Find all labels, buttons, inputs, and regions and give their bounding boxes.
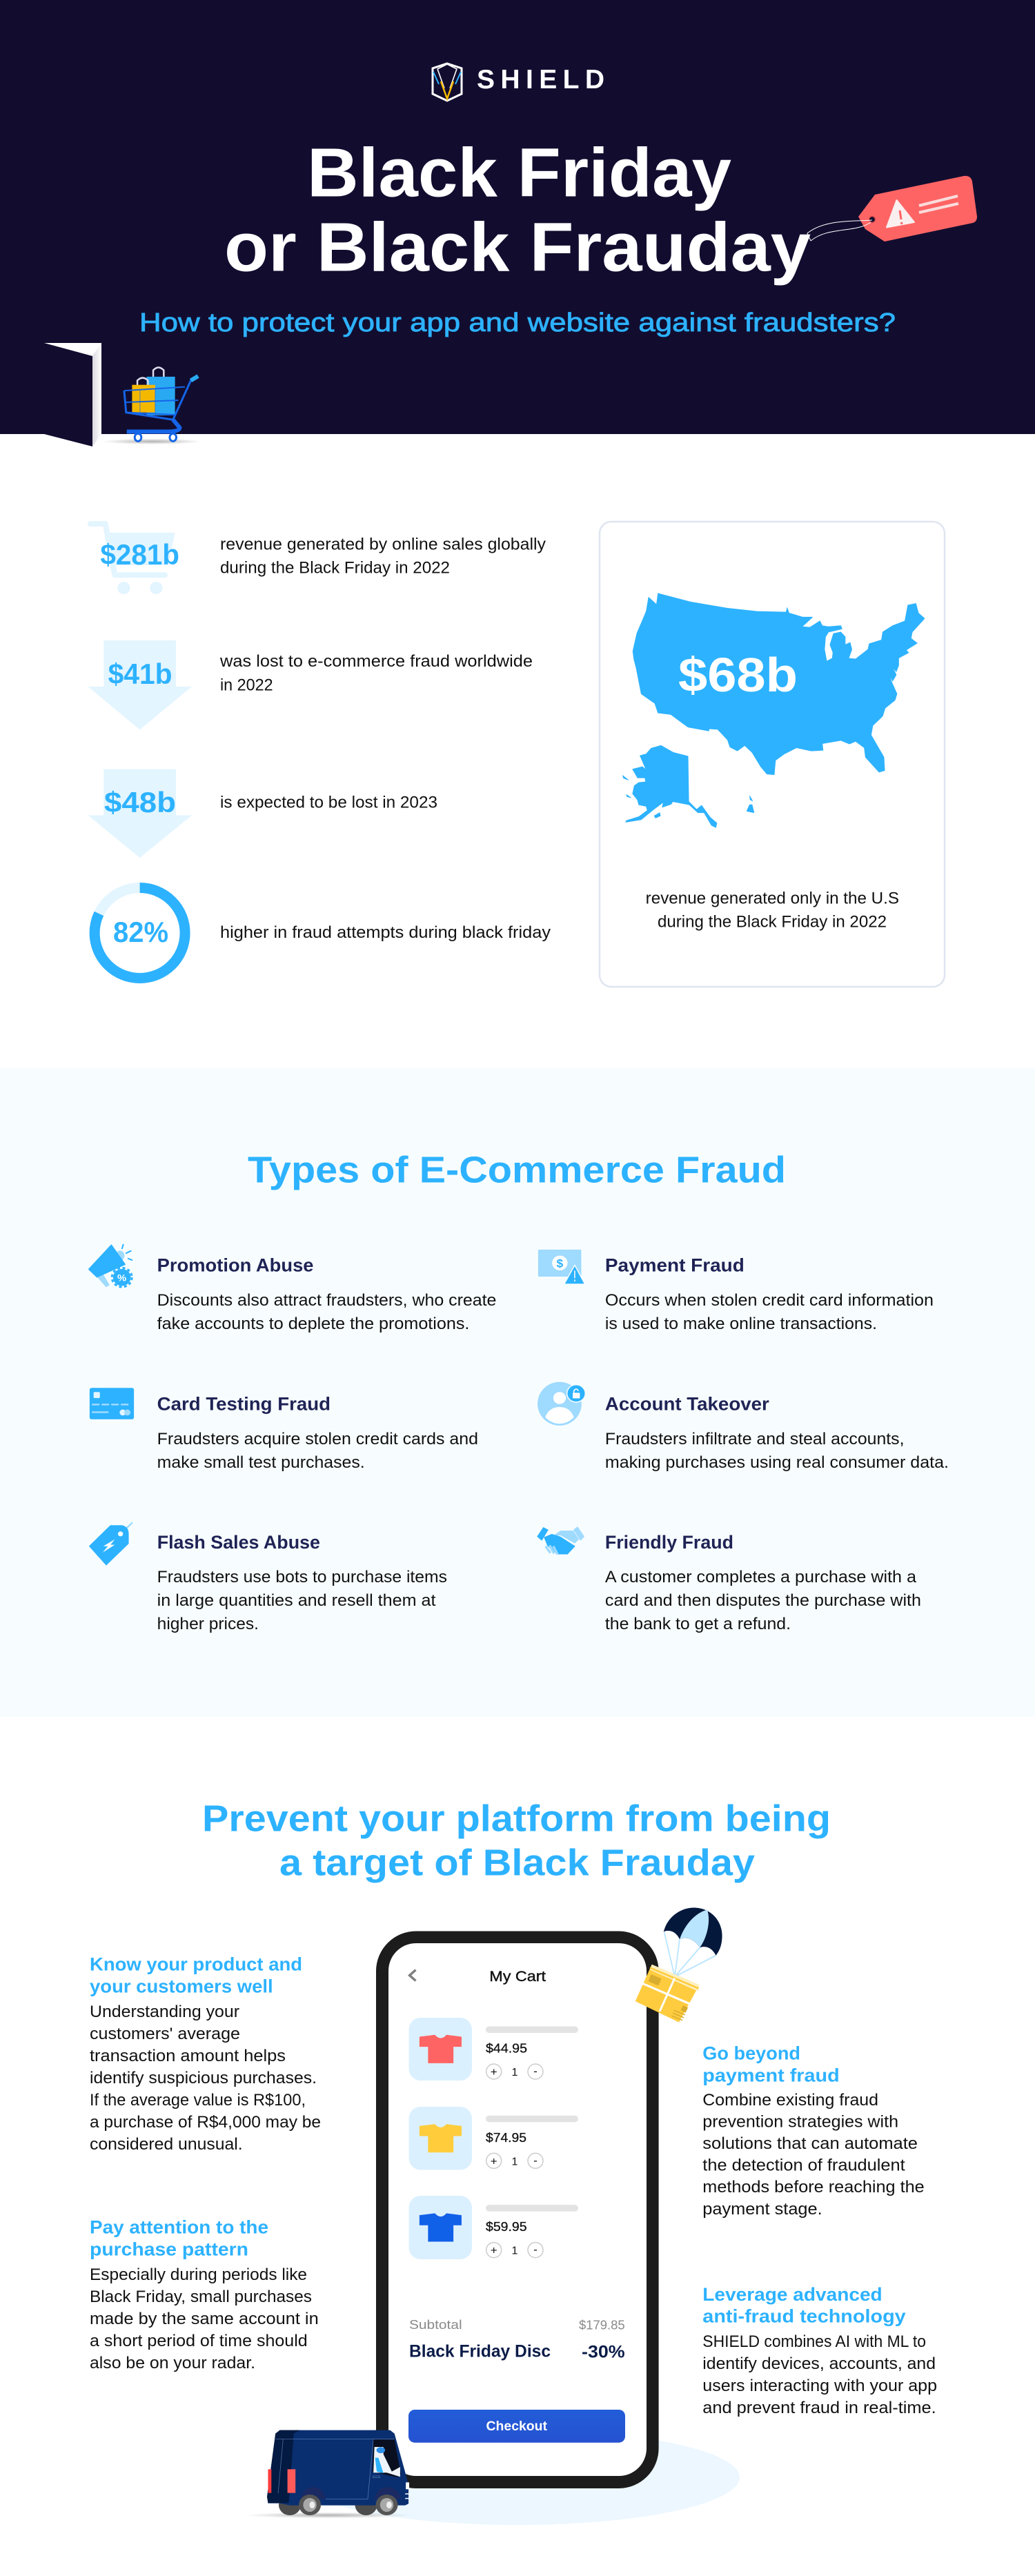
title: Black Friday [307, 134, 731, 211]
icon: megaphone: % [117, 1273, 126, 1284]
name: Card Testing Fraud [157, 1393, 331, 1414]
name: Flash Sales Abuse [157, 1532, 320, 1553]
subtotal row: Subtotal [409, 2318, 462, 2332]
description [219, 652, 533, 694]
description: in 2022 [220, 676, 273, 694]
icon: megaphone [89, 1244, 132, 1287]
tip: purchase pattern: purchase pattern [90, 2239, 248, 2259]
description: higher prices. [157, 1615, 259, 1633]
logo: SHIELD [433, 63, 604, 101]
stat: 281b [90, 524, 546, 594]
stat: 41b [88, 640, 533, 729]
cart item 3 [408, 2196, 578, 2259]
description: was lost to e-commerce fraud worldwide [219, 652, 533, 671]
illustration: phone with cart [376, 1931, 659, 2488]
tip: know your product: a purchase of R$4,000 may be [90, 2113, 321, 2132]
tip: know your product: considered unusual. [90, 2135, 243, 2154]
name: Account Takeover [605, 1393, 769, 1414]
tip: know your product [90, 1954, 321, 2154]
cart item 2: 1 [512, 2156, 518, 2167]
tip: go beyond payment fraud: methods before reaching the [702, 2178, 925, 2196]
illustration: ground ellipse [295, 2430, 740, 2525]
subtitle: How to protect your app and website against fraudsters? [139, 308, 896, 337]
description: is expected to be lost in 2023 [220, 794, 437, 812]
logo: SHIELD: SHIELD [477, 65, 604, 95]
tip: know your product: your customers well [90, 1976, 273, 1997]
description: is used to make online transactions. [605, 1315, 877, 1333]
discount row: -30% [582, 2343, 625, 2362]
value: $48b [104, 786, 176, 818]
cart item 3: - [533, 2243, 538, 2257]
description: Fraudsters acquire stolen credit cards and [157, 1430, 478, 1448]
fraud: card testing [90, 1388, 478, 1472]
checkout button: Checkout [486, 2419, 547, 2434]
tip: advanced anti-fraud technology: users interacting with your app [702, 2377, 937, 2395]
tip: go beyond payment fraud: Go beyond [702, 2043, 800, 2064]
description: make small test purchases. [157, 1453, 365, 1472]
icon: shopping cart with bags [102, 367, 201, 444]
cart title: My Cart [489, 1969, 546, 1985]
cart item 1: - [533, 2065, 538, 2078]
description: revenue generated only in the U.S [646, 889, 899, 907]
panel: US revenue card [600, 522, 945, 987]
tip: advanced anti-fraud technology: SHIELD combines AI with ML to [702, 2332, 926, 2351]
cart item 3: $59.95 [486, 2219, 527, 2234]
panel: types of e-commerce fraud [0, 1068, 1035, 1717]
discount row: Black Friday Disc [409, 2342, 551, 2361]
fraud: account takeover [538, 1382, 949, 1472]
chart: progress ring [95, 887, 185, 979]
heading: Types of E-Commerce Fraud [248, 1149, 786, 1190]
icon: credit card [90, 1388, 134, 1419]
icon: handshake [537, 1526, 584, 1555]
heading: prevent your platform: a target of Black Frauday [279, 1842, 755, 1884]
cart item 1 [408, 2018, 578, 2081]
icon: warning price tag [807, 176, 977, 242]
tip: know your product: customers' average [90, 2025, 240, 2043]
description: fake accounts to deplete the promotions. [157, 1315, 469, 1333]
tip: go beyond payment fraud: Combine existing fraud [702, 2091, 878, 2110]
name: Promotion Abuse [157, 1255, 313, 1275]
tip: know your product: Know your product and [90, 1954, 302, 1975]
tip: advanced anti-fraud technology: identify devices, accounts, and [702, 2354, 936, 2373]
subtotal row [409, 2318, 625, 2332]
cart item 3: + [491, 2244, 497, 2257]
description: during the Black Friday in 2022 [658, 912, 887, 931]
tip: know your product: If the average value is R$100, [90, 2091, 306, 2110]
tip: purchase pattern: Pay attention to the [90, 2216, 268, 2237]
name: Friendly Fraud [605, 1532, 733, 1553]
description [157, 1430, 478, 1472]
cart item 1: 1 [512, 2067, 518, 2078]
fraud: friendly fraud [537, 1526, 921, 1633]
tip: purchase pattern [90, 2216, 319, 2372]
heading: prevent your platform: Prevent your platform from being [202, 1798, 831, 1839]
cart item 2: $74.95 [486, 2130, 526, 2145]
tip: purchase pattern: made by the same account in [90, 2310, 319, 2328]
tip: purchase pattern: also be on your radar. [90, 2354, 255, 2372]
value: 82% [113, 916, 168, 948]
icon: door [44, 343, 101, 446]
tip: advanced anti-fraud technology [702, 2284, 937, 2417]
description [605, 1291, 934, 1333]
icon: back chevron [410, 1970, 415, 1980]
value: $68b [678, 648, 798, 702]
tip: go beyond payment fraud: payment stage. [702, 2200, 822, 2219]
title: or Black Frauday [224, 209, 811, 286]
value: $41b [108, 658, 172, 690]
tip: purchase pattern: a short period of time should [90, 2332, 308, 2350]
stat: 48b [88, 769, 437, 858]
fraud: promotion abuse [89, 1244, 496, 1333]
tip: know your product: transaction amount helps [90, 2047, 286, 2065]
map: United States [622, 593, 925, 827]
tip: go beyond payment fraud: prevention strategies with [702, 2112, 898, 2131]
icon: pale cart [90, 524, 175, 594]
tip: know your product: Understanding your [90, 2003, 239, 2021]
icon: down arrow [88, 769, 192, 858]
illustration: delivery van [245, 2430, 412, 2518]
description [605, 1430, 949, 1472]
fraud: flash sales abuse [90, 1522, 447, 1633]
cart item 2: - [533, 2154, 538, 2167]
illustration: parachute with package [635, 1907, 722, 2023]
cart item 3: 1 [512, 2245, 518, 2257]
description [220, 535, 546, 577]
heading: prevent your platform [202, 1798, 831, 1884]
panel: header [0, 0, 1035, 446]
stat: 82 percent [95, 887, 551, 979]
icon: user with lock [538, 1382, 585, 1426]
discount row [409, 2342, 625, 2362]
description: Fraudsters use bots to purchase items [157, 1568, 447, 1586]
subtotal row: $179.85 [579, 2319, 625, 2332]
description [157, 1291, 496, 1333]
description: A customer completes a purchase with a [605, 1568, 917, 1586]
description: Discounts also attract fraudsters, who create [157, 1291, 496, 1310]
cart item 1: $44.95 [486, 2041, 527, 2055]
description: during the Black Friday in 2022 [220, 558, 450, 577]
panel: key statistics [88, 524, 551, 979]
description: the bank to get a refund. [605, 1615, 791, 1633]
tip: go beyond payment fraud [702, 2043, 925, 2219]
icon: down arrow [88, 640, 192, 729]
cart item 1: + [491, 2065, 497, 2078]
tip: advanced anti-fraud technology: Leverage advanced [702, 2284, 883, 2305]
tip: go beyond payment fraud: the detection of fraudulent [702, 2156, 905, 2175]
description: Occurs when stolen credit card information [605, 1291, 934, 1310]
icon: banknote with warning [538, 1250, 585, 1284]
tip: go beyond payment fraud: payment fraud [702, 2065, 840, 2085]
description [646, 889, 899, 931]
tip: purchase pattern: Especially during periods like [90, 2265, 307, 2284]
description [157, 1568, 447, 1633]
description: card and then disputes the purchase with [605, 1591, 921, 1610]
description [605, 1568, 921, 1633]
checkout button [408, 2410, 625, 2443]
description: making purchases using real consumer data. [605, 1453, 949, 1472]
tip: go beyond payment fraud: solutions that can automate [702, 2134, 918, 2153]
description: revenue generated by online sales globally [220, 535, 546, 553]
title [224, 134, 811, 286]
fraud: payment fraud [538, 1250, 934, 1333]
cart item 2: + [491, 2154, 497, 2167]
tip: purchase pattern: Black Friday, small purchases [90, 2288, 312, 2306]
icon: banknote with warning: $ [557, 1257, 564, 1270]
tip: advanced anti-fraud technology: and prevent fraud in real-time. [702, 2399, 936, 2417]
tip: know your product: identify suspicious purchases. [90, 2069, 317, 2087]
value: $281b [100, 538, 179, 571]
name: Payment Fraud [605, 1255, 745, 1275]
description: Fraudsters infiltrate and steal accounts, [605, 1430, 904, 1448]
icon: lightning tag [90, 1522, 132, 1565]
description: in large quantities and resell them at [157, 1591, 436, 1610]
tip: advanced anti-fraud technology: anti-fraud technology [702, 2306, 906, 2327]
cart item 2 [408, 2107, 578, 2170]
description: higher in fraud attempts during black friday [220, 923, 551, 942]
